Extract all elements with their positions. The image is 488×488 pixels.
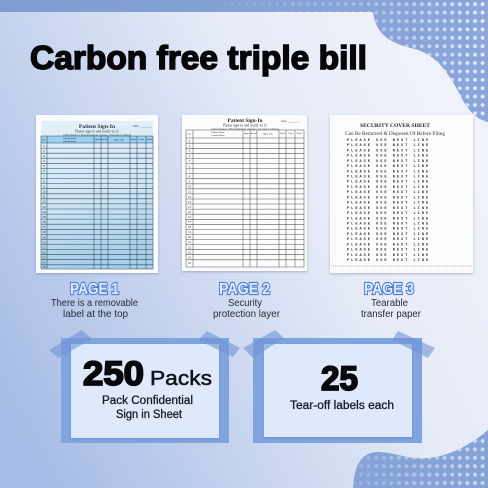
row numbers: 6	[43, 169, 45, 173]
header labels: Arrival	[250, 132, 257, 135]
row numbers: 5	[189, 159, 191, 163]
row numbers: 20	[42, 240, 46, 244]
date field: Date: ________	[133, 124, 152, 128]
repeated lines: PLEASE USE NEXT LINE	[347, 243, 430, 247]
row numbers: 18	[42, 230, 46, 234]
repeated lines: PLEASE USE NEXT LINE	[347, 249, 430, 253]
row numbers: 8	[189, 174, 191, 178]
repeated lines: PLEASE USE NEXT LINE	[347, 181, 430, 185]
row numbers: 19	[188, 230, 191, 234]
row numbers: 22	[188, 246, 191, 250]
header labels: Time	[139, 139, 145, 141]
repeated lines: PLEASE USE NEXT LINE	[347, 259, 430, 263]
header labels: No.	[188, 134, 192, 136]
big number: 250	[83, 355, 144, 393]
header labels: Patient Name	[211, 131, 225, 134]
row numbers: 10	[42, 190, 46, 194]
repeated lines: PLEASE USE NEXT LINE	[347, 155, 430, 159]
caption: Sign in Sheet	[116, 409, 183, 421]
header labels: Appt	[95, 138, 100, 141]
row numbers: 10	[188, 184, 191, 188]
header labels: Family Name	[64, 141, 77, 143]
sheet heading: Patient Sign-In	[79, 124, 116, 130]
sheet subtitle: Please sign-in and notify us if:	[223, 124, 267, 128]
row numbers: 7	[189, 170, 191, 174]
row numbers: 23	[188, 250, 191, 254]
repeated lines: PLEASE USE NEXT LINE	[347, 160, 430, 164]
page 3 badge: PAGE 3	[364, 281, 414, 298]
repeated lines: PLEASE USE NEXT LINE	[347, 176, 430, 180]
row numbers: 22	[42, 250, 46, 254]
row numbers: 21	[42, 246, 46, 250]
page 1 description: There is a removable	[51, 298, 138, 309]
row numbers: 11	[188, 190, 191, 194]
caption: Tear-off labels each	[290, 400, 394, 412]
panel: 250 packs card	[49, 330, 240, 443]
row numbers: 13	[42, 205, 46, 209]
header labels: Notes	[297, 132, 303, 135]
row numbers: 1	[43, 144, 45, 148]
card sheet	[264, 344, 412, 437]
row numbers: 24	[188, 256, 191, 260]
repeated lines: PLEASE USE NEXT LINE	[347, 144, 430, 148]
sheet heading: Patient Sign-In	[228, 118, 262, 124]
row numbers: 13	[188, 200, 191, 204]
page 1 badge: PAGE 1	[70, 281, 119, 298]
page 3 description: Tearable	[371, 298, 408, 309]
row numbers: 21	[188, 240, 191, 244]
repeated lines: PLEASE USE NEXT LINE	[347, 165, 430, 169]
row numbers: 18	[188, 225, 191, 229]
row numbers: 15	[188, 210, 191, 214]
row numbers: 17	[42, 225, 46, 229]
row numbers: 24	[42, 260, 46, 264]
repeated lines: PLEASE USE NEXT LINE	[347, 186, 430, 190]
header labels: Appt. with	[114, 138, 125, 142]
row numbers: 5	[43, 164, 45, 168]
header labels: Patient Name	[63, 137, 77, 140]
header labels: Notes	[147, 138, 154, 141]
label: page 3	[361, 281, 422, 320]
sheet subtitle: Please sign-in and notify us if:	[75, 130, 119, 134]
repeated lines: PLEASE USE NEXT LINE	[347, 228, 430, 232]
row numbers: 6	[189, 164, 191, 168]
header labels: Arrival	[101, 138, 108, 141]
card sheet	[71, 344, 219, 438]
label: page 2	[213, 281, 281, 320]
row numbers: 7	[43, 174, 45, 178]
table grid	[186, 130, 304, 267]
row numbers: 2	[43, 149, 45, 153]
header labels: Seen	[131, 139, 137, 141]
decorative top band and blob	[0, 0, 488, 122]
row numbers: 25	[188, 261, 191, 265]
header labels: No.	[42, 140, 46, 142]
row numbers: 11	[42, 194, 46, 198]
row numbers: 8	[43, 180, 45, 184]
header labels: Time	[288, 133, 294, 135]
panel: page 1 sheet	[36, 115, 158, 273]
card backing	[253, 338, 422, 443]
row numbers: 25	[42, 265, 46, 269]
repeated lines: PLEASE USE NEXT LINE	[347, 254, 430, 258]
row numbers: 4	[43, 159, 45, 163]
row numbers: 9	[43, 184, 45, 188]
repeated lines: PLEASE USE NEXT LINE	[347, 238, 430, 242]
repeated lines: PLEASE USE NEXT LINE	[347, 149, 430, 153]
header labels: Family Name	[212, 135, 225, 137]
tape left	[49, 330, 92, 358]
row numbers: 20	[188, 235, 191, 239]
unit: Packs	[150, 368, 212, 390]
title: Carbon free triple bill	[30, 39, 367, 76]
row numbers: 14	[42, 210, 46, 214]
row numbers: 3	[43, 154, 45, 158]
tape right	[198, 331, 240, 357]
repeated lines: PLEASE USE NEXT LINE	[347, 217, 430, 221]
sheet subtitle: Can Be Removed & Disposed Of Before Filing	[345, 132, 446, 137]
panel: page 3 sheet	[330, 115, 473, 273]
repeated lines: PLEASE USE NEXT LINE	[347, 233, 430, 237]
big number: 25	[321, 360, 358, 398]
row numbers: 14	[188, 205, 191, 209]
row numbers: 2	[189, 144, 191, 148]
header labels: Seen	[280, 133, 286, 135]
date field: Date: ________	[281, 119, 300, 123]
page 2 description: Security	[228, 298, 262, 309]
tear line	[331, 265, 472, 267]
row numbers: 19	[42, 236, 46, 240]
sheet heading: SECURITY COVER SHEET	[360, 123, 430, 129]
header labels: Appt	[244, 132, 249, 135]
panel: 25 labels card	[243, 330, 435, 443]
panel: page 2 sheet	[182, 115, 307, 271]
row numbers: 23	[42, 256, 46, 260]
tape right	[392, 331, 435, 358]
row numbers: 12	[188, 195, 191, 199]
repeated lines: PLEASE USE NEXT LINE	[347, 191, 430, 195]
page 2 badge: PAGE 2	[219, 281, 270, 298]
row numbers: 16	[188, 215, 191, 219]
page 1 description: label at the top	[63, 309, 128, 320]
repeated lines: PLEASE USE NEXT LINE	[347, 207, 430, 211]
table header	[41, 136, 153, 143]
tape left	[243, 330, 284, 358]
repeated lines: PLEASE USE NEXT LINE	[347, 202, 430, 206]
page 2 description: protection layer	[213, 309, 281, 320]
sheet options: • New Patient • Phone/address change • Insurance Change	[211, 127, 280, 131]
label: page 1	[51, 281, 138, 320]
table grid	[41, 136, 153, 269]
repeated lines: PLEASE USE NEXT LINE	[347, 222, 430, 226]
row numbers: 17	[188, 220, 191, 224]
page 3 description: transfer paper	[361, 309, 422, 320]
row numbers: 9	[189, 180, 191, 184]
repeated lines: PLEASE USE NEXT LINE	[347, 212, 430, 216]
repeated lines: PLEASE USE NEXT LINE	[347, 170, 430, 174]
row numbers: 16	[42, 220, 46, 224]
card backing	[61, 338, 229, 443]
caption: Pack Confidential	[102, 395, 193, 407]
decorative bottom-right blob	[353, 430, 488, 488]
sheet tint	[41, 121, 153, 269]
repeated lines: PLEASE USE NEXT LINE	[347, 196, 430, 200]
row numbers: 4	[189, 154, 191, 158]
row numbers: 1	[189, 139, 191, 143]
sheet options: • New Patient • Phone/address change • Insurance Change	[63, 133, 132, 137]
row numbers: 12	[42, 200, 46, 204]
header labels: Appt. with	[263, 132, 274, 136]
repeated lines: PLEASE USE NEXT LINE	[347, 139, 430, 143]
row numbers: 3	[189, 149, 191, 153]
row numbers: 15	[42, 215, 46, 219]
